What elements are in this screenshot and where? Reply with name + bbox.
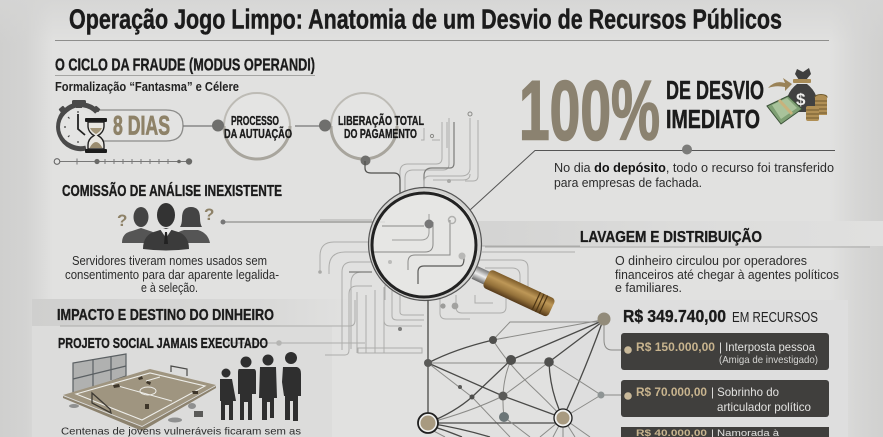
circuit board traces — [60, 112, 580, 355]
heading: impacto: IMPACTO E DESTINO DO DINHEIRO — [57, 307, 274, 324]
icon: money bag, bills and coins: $ — [796, 90, 806, 109]
body text: depósito: para empresas de fachada. — [554, 175, 702, 190]
subheading: formalização: Formalização “Fantasma” e Célere — [55, 80, 239, 94]
card: sobrinho: R$ 70.000,00 — [636, 385, 707, 399]
body text: lavagem: O dinheiro circulou por operadores — [615, 254, 807, 268]
card: interposta pessoa: R$ 150.000,00 — [636, 340, 715, 354]
card: interposta pessoa: (Amiga de investigado) — [719, 354, 818, 366]
body text: comissão: Servidores tiveram nomes usados sem — [72, 254, 267, 268]
total label: EM RECURSOS — [732, 310, 818, 326]
panel: lavagem e distribuição — [485, 226, 870, 295]
node — [682, 144, 692, 154]
card: sobrinho: | Sobrinho do — [711, 385, 779, 399]
step: liberação total: DO PAGAMENTO — [344, 126, 417, 141]
body text: lavagem — [615, 254, 839, 295]
panel: recursos — [621, 306, 829, 437]
illustration: abandoned soccer field — [63, 354, 216, 431]
icon: stopwatch — [58, 100, 101, 149]
icon: magnifying glass — [368, 188, 556, 317]
icon: money bag, bills and coins — [767, 68, 827, 124]
heading: ciclo da fraude: O CICLO DA FRAUDE (MODUS OPERANDI) — [55, 54, 315, 74]
pill: 8 dias — [100, 110, 183, 141]
panel: impacto e destino do dinheiro — [57, 307, 301, 437]
callout line to magnifier — [470, 150, 835, 210]
body text: depósito: No dia do depósito, todo o recurso foi transferido — [554, 160, 834, 175]
step: liberação total: LIBERAÇÃO TOTAL — [338, 113, 424, 128]
node — [276, 340, 282, 346]
card: sobrinho: articulador político — [717, 400, 811, 414]
node: source — [598, 312, 610, 326]
total amount: R$ 349.740,00 — [623, 306, 726, 326]
heading: comissão: COMISSÃO DE ANÁLISE INEXISTENTE — [62, 182, 282, 200]
card: interposta pessoa: | Interposta pessoa — [719, 340, 815, 354]
heading: lavagem: LAVAGEM E DISTRIBUIÇÃO — [580, 226, 762, 246]
network diagram — [418, 300, 628, 437]
icon: three silhouettes with question marks: ? — [117, 211, 127, 230]
node — [220, 220, 226, 224]
icon: three silhouettes with question marks — [117, 203, 214, 250]
panel: comissão de análise inexistente — [62, 182, 282, 295]
panel: o ciclo da fraude — [54, 54, 424, 194]
step: processo da autuação — [212, 93, 292, 159]
connector — [183, 125, 325, 127]
body text: lavagem: financeiros até chegar à agentes políticos — [615, 268, 839, 282]
card: interposta pessoa — [621, 333, 829, 370]
card: third recipient — [621, 427, 829, 437]
body text: comissão — [65, 254, 279, 295]
body text: comissão: consentimento para dar aparente legalida- — [65, 268, 279, 282]
step: processo da autuação: DA AUTUAÇÃO — [224, 126, 292, 141]
body text: comissão: e à seleção. — [141, 281, 198, 295]
subheading: projeto social: PROJETO SOCIAL JAMAIS EXECUTADO — [58, 335, 268, 352]
step: processo da autuação: PROCESSO — [231, 113, 279, 128]
big number: 100% — [519, 64, 660, 158]
icon: three silhouettes with question marks: ? — [204, 205, 214, 224]
label: de desvio imediato: DE DESVIO — [666, 75, 764, 105]
timeline — [54, 158, 192, 165]
step: liberação total — [319, 93, 424, 194]
label: de desvio imediato: IMEDIATO — [666, 104, 760, 134]
pill: 8 dias: 8 DIAS — [113, 110, 170, 140]
body text: depósito — [554, 160, 834, 190]
card: sobrinho — [621, 380, 829, 417]
icon: hourglass — [85, 118, 107, 153]
illustration: silhouettes of youths — [220, 352, 301, 421]
panel: 100% de desvio imediato — [470, 64, 835, 210]
body text: lavagem: e familiares. — [615, 281, 682, 295]
node: hub left — [418, 413, 438, 433]
node: hub right — [554, 409, 572, 427]
label: de desvio imediato — [666, 75, 764, 134]
